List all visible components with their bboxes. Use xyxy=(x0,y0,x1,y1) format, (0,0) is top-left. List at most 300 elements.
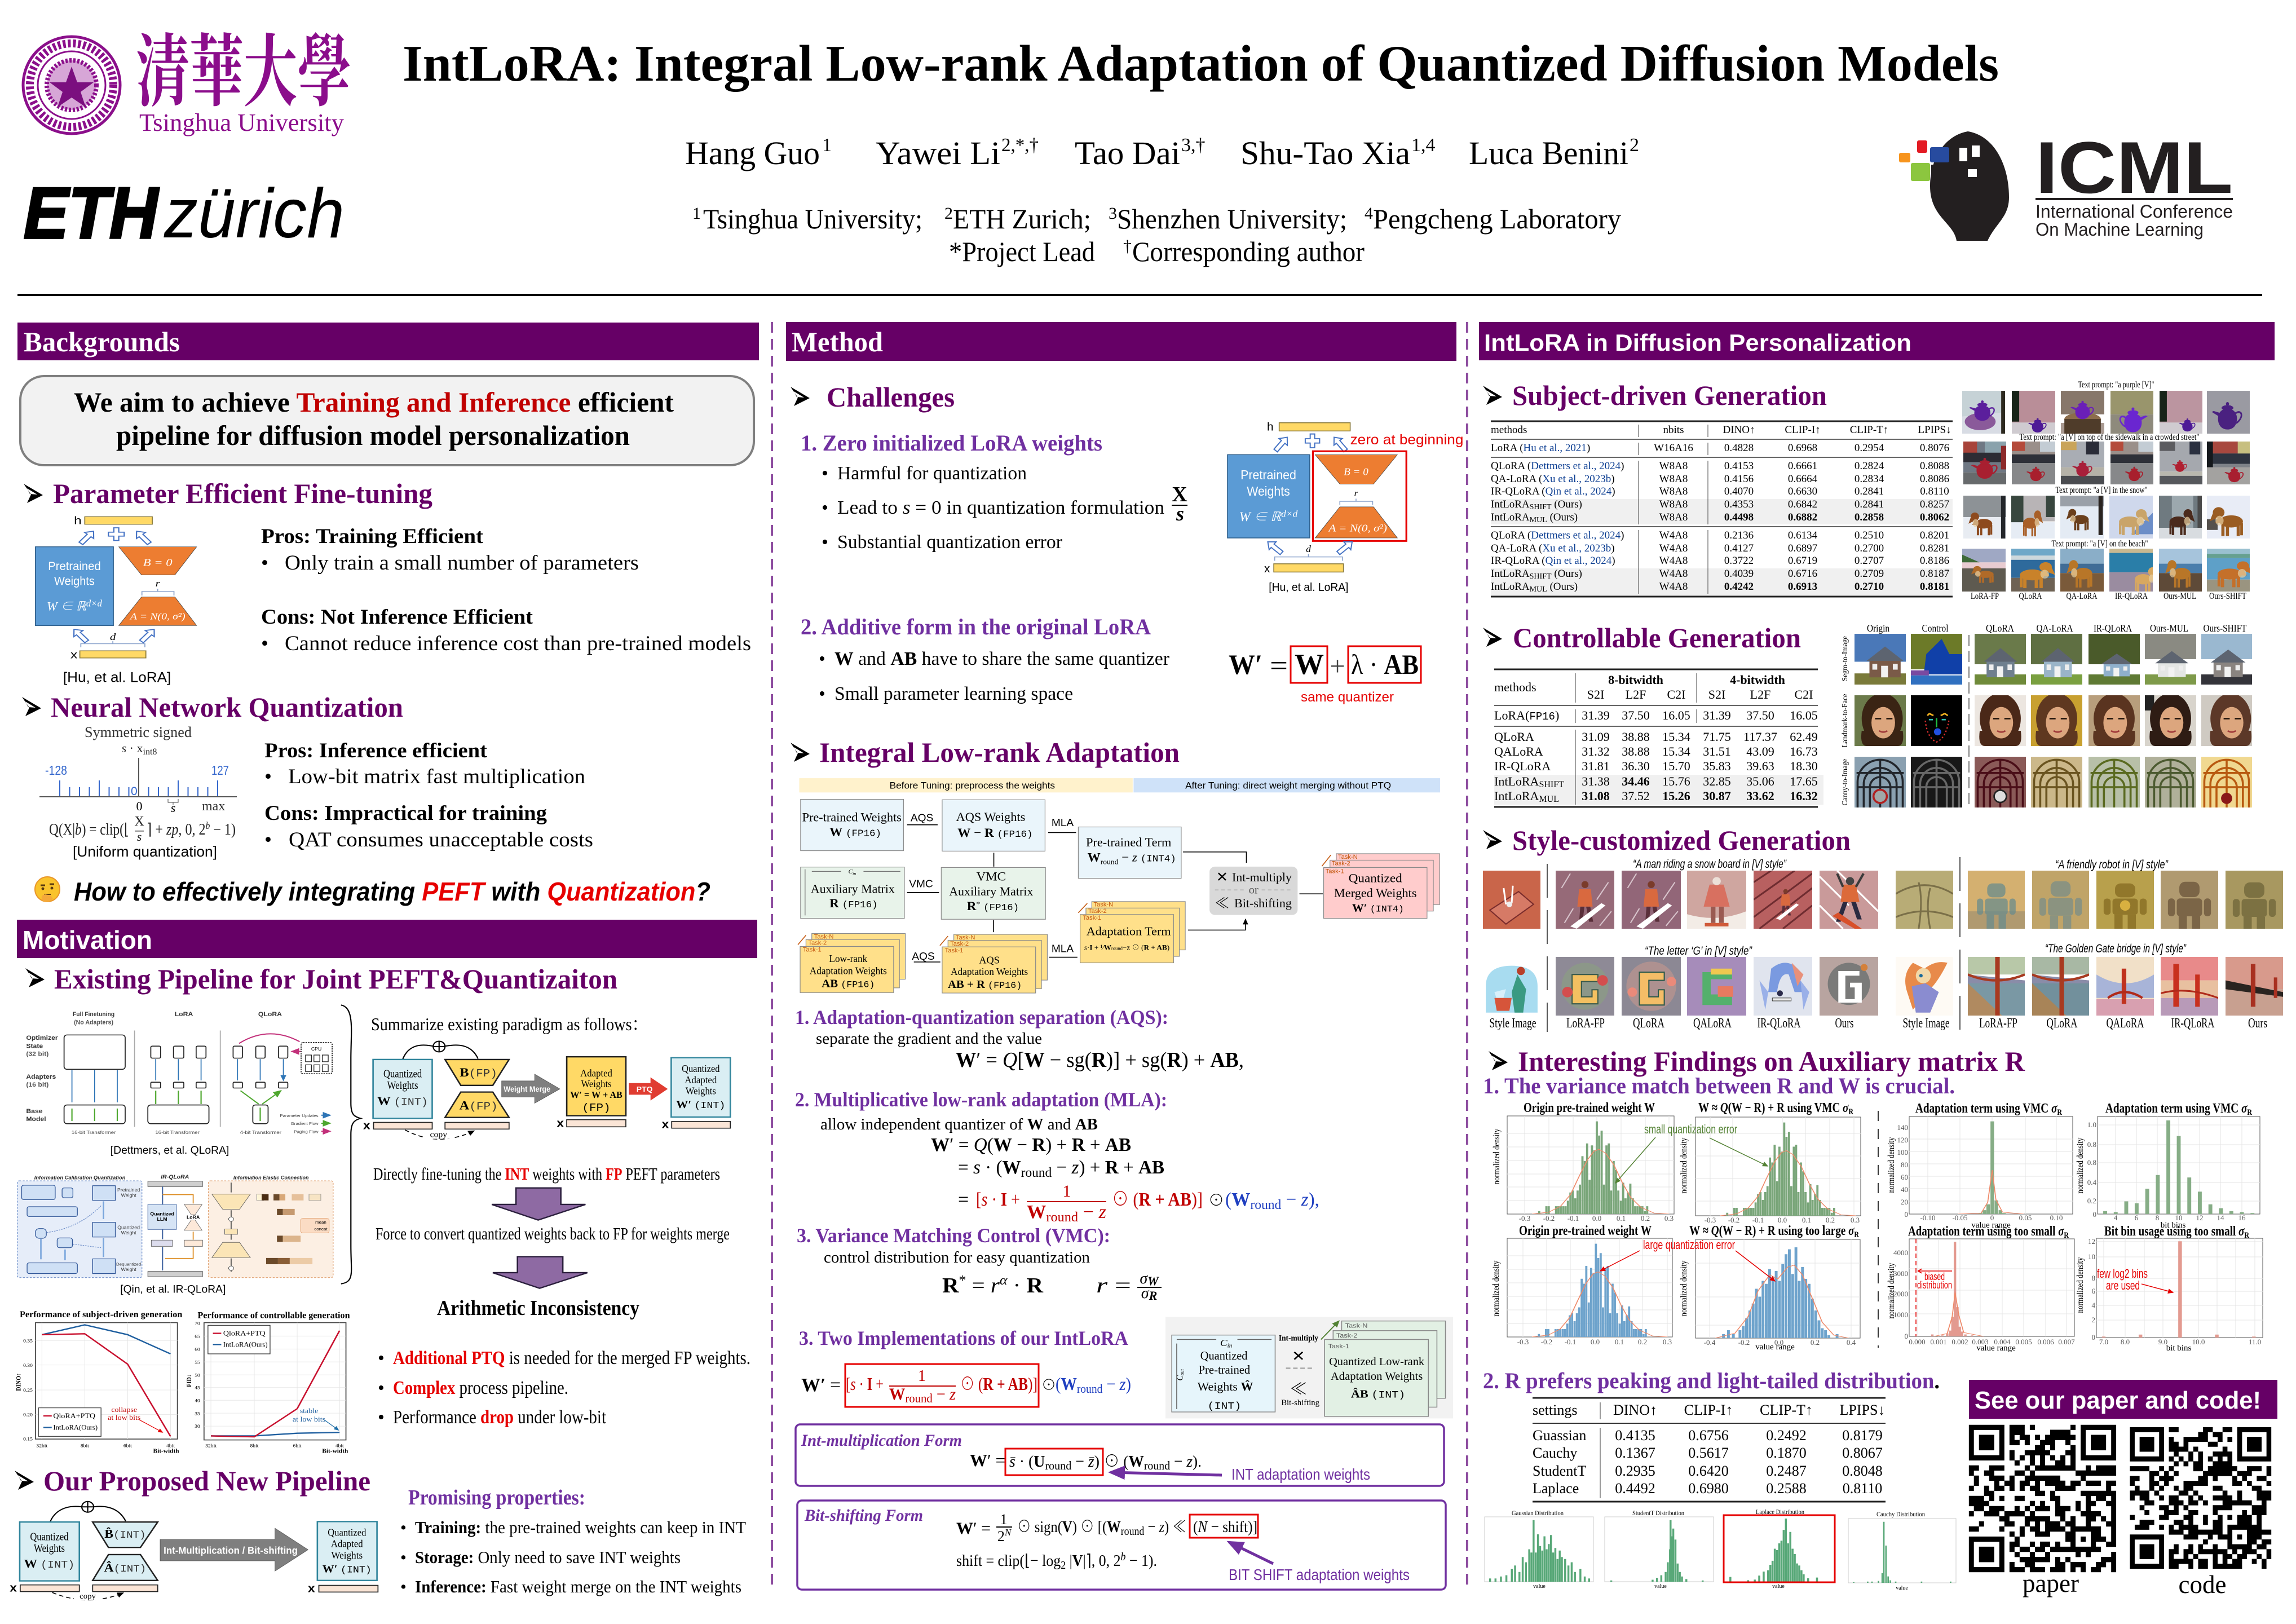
text: MLA: z xyxy=(1098,1202,1106,1223)
chart: subject-driven performance: 0.15 xyxy=(23,1436,33,1441)
text: promising properties: • xyxy=(400,1547,407,1567)
chart: origin weight VMC: 0.0 xyxy=(1592,1214,1601,1223)
chart: reconstructed weight VMC: 0.2 xyxy=(1826,1216,1835,1224)
diagram: IR-QLoRA: Information Elastic Connection xyxy=(233,1175,309,1181)
table: controllable results: 39.63 xyxy=(1746,759,1774,773)
table: controllable results: 37.50 xyxy=(1746,708,1774,722)
diagram: IntLoRA flow: Pre-trained Weights xyxy=(802,810,902,824)
table: controllable results: IntLoRA xyxy=(1494,789,1539,803)
diagram: IntLoRA flow: MLA xyxy=(1052,943,1074,954)
image grid: style samples xyxy=(1483,857,2283,1032)
text: VMC: r xyxy=(991,1274,1000,1298)
text: promising properties: Training: the pre-trained weights can keep in INT xyxy=(415,1517,746,1537)
table: distribution results: 0.6420 xyxy=(1688,1463,1729,1479)
table: controllable results: 4-bitwidth xyxy=(1730,673,1785,687)
chart: subject-driven performance: Bit-width xyxy=(153,1448,179,1454)
chart: controllable performance: 6bit xyxy=(293,1443,302,1448)
chart: bit bins VMC: 0 xyxy=(2093,1210,2096,1219)
chart: StudentT distribution: StudentT Distribution xyxy=(1632,1509,1684,1517)
table: subject-driven results: 0.2834 xyxy=(1855,473,1884,485)
chart: reconstructed weight VMC: W ≈ Q(W − R) + R using VMC σ xyxy=(1698,1101,1869,1115)
table: distribution results: Cauchy xyxy=(1533,1445,1577,1461)
image grid: controllable samples: Origin xyxy=(1867,623,1889,634)
text: AQS: 1. Adaptation-quantization separation (AQS): xyxy=(795,1006,1168,1029)
table: subject-driven results: 0.8088 xyxy=(1920,460,1949,472)
affiliations: Shenzhen University; xyxy=(1117,203,1347,235)
logo: Tsinghua University: 清華大學 xyxy=(136,9,351,122)
chart: reconstructed weight VMC: 0.0 xyxy=(1778,1216,1787,1224)
image grid: style samples: QALoRA xyxy=(2107,1016,2144,1031)
text: quantization pros and cons: Low-bit matrix fast multiplication xyxy=(288,765,585,788)
table: subject-driven results: W4A8 xyxy=(1659,555,1688,567)
table: subject-driven results: 0.3722 xyxy=(1724,555,1754,567)
chart: bit bins too small: 2 xyxy=(2092,1316,2095,1324)
table: subject-driven results: 0.8281 xyxy=(1920,542,1949,554)
chart: bit bins too small: R xyxy=(2244,1231,2249,1240)
diagram: QLoRA comparison: Adapters xyxy=(26,1073,56,1080)
diagram: uniform quantization: 0 xyxy=(131,785,138,798)
table: subject-driven results: (Ours) xyxy=(1547,581,1578,593)
diagram: existing pipeline: Weights xyxy=(581,1079,612,1090)
affiliations: 4 xyxy=(1365,204,1373,223)
diagram: IR-QLoRA: LLM xyxy=(157,1217,167,1222)
table: subject-driven results: 0.4498 xyxy=(1724,511,1754,523)
table: controllable results: QLoRA xyxy=(1494,730,1534,744)
text: challenge 2: • xyxy=(819,648,825,669)
chart: subject-driven performance xyxy=(15,1309,183,1454)
text: MLA: − xyxy=(1078,1202,1099,1223)
chart: bit bins too small: 12 xyxy=(2088,1237,2095,1246)
panel: Bit-shifting form: 2 xyxy=(1061,1559,1066,1572)
chart: adaptation term too small: 0.005 xyxy=(2015,1338,2032,1346)
image grid: controllable samples: QA-LoRA xyxy=(2037,623,2073,634)
text: summarize: Summarize existing paradigm as follows： xyxy=(371,1014,648,1034)
panel: Bit-shifting form: N xyxy=(1004,1527,1012,1538)
text: Two implementations: − xyxy=(933,1385,950,1404)
heading: Motivation xyxy=(17,920,757,958)
diagram: IntLoRA flow: AQS xyxy=(911,812,933,823)
text: Two implementations: ⊙ xyxy=(1041,1377,1056,1393)
diagram: uniform quantization: − 1) xyxy=(210,821,236,839)
image grid: controllable samples: Landmark-to-Face xyxy=(1841,694,1849,748)
diagram: LoRA zero initialization: Pretrained xyxy=(1240,467,1296,482)
table: controllable results: C2I xyxy=(1794,687,1813,701)
table: controllable results: 34.46 xyxy=(1622,774,1650,788)
diagram: IR-QLoRA: Information Calibration Quantization xyxy=(34,1175,125,1181)
image grid: style samples: Style Image xyxy=(1490,1016,1536,1031)
diagram: IntLoRA flow: Pre-trained Term xyxy=(1086,835,1172,849)
diagram: IR-QLoRA xyxy=(17,1174,333,1295)
chart: adaptation term VMC: normalized density xyxy=(1887,1137,1896,1193)
chart: adaptation term VMC: 100 xyxy=(1897,1148,1908,1157)
chart: bit bins VMC: 6 xyxy=(2135,1213,2139,1222)
diagram: proposed pipeline: Adapted xyxy=(331,1538,363,1550)
chart: reconstructed weight too large: 0.4 xyxy=(1847,1338,1856,1347)
table: subject-driven results: MUL xyxy=(1530,516,1547,524)
text: MLA: [s · I + xyxy=(976,1189,1020,1210)
table: distribution results: 0.6980 xyxy=(1688,1480,1729,1497)
panel: Int-multiplication form: W′ = xyxy=(970,1450,1005,1470)
QR code: code: code xyxy=(2179,1570,2226,1599)
diagram: existing pipeline: copy xyxy=(430,1131,448,1139)
chart: controllable performance: 35 xyxy=(195,1411,200,1416)
heading: Challenges: Challenges xyxy=(827,381,955,413)
diagram: quantized weights shift: Task-N xyxy=(1345,1322,1367,1330)
diagram: proposed pipeline: Â(INT) xyxy=(104,1560,146,1575)
text: promising properties xyxy=(400,1486,746,1596)
diagram: IR-QLoRA: Weight xyxy=(121,1266,136,1272)
panel: Method xyxy=(786,322,1463,1590)
image grid: style samples: IR-QLoRA xyxy=(2171,1016,2215,1031)
image grid: controllable samples: Canny-to-Image xyxy=(1841,759,1849,805)
diagram: proposed pipeline: Quantized xyxy=(30,1530,69,1543)
panel: Int-multiplication form: z). xyxy=(1186,1453,1202,1471)
table: controllable results: 31.51 xyxy=(1703,744,1731,758)
chart: adaptation term VMC: value range xyxy=(1971,1221,2011,1230)
diagram: IntLoRA flow: ≪ xyxy=(1215,895,1230,911)
heading: R prefers: 2. R prefers peaking and light-tailed distribution. xyxy=(1483,1368,1940,1393)
chart: adaptation term VMC: 40 xyxy=(1901,1185,1908,1194)
chart: adaptation term too small: normalized density xyxy=(1887,1263,1896,1318)
chart: reconstructed weight too large: normalized density xyxy=(1679,1261,1689,1316)
text: Two implementations: round xyxy=(1077,1382,1102,1396)
table: subject-driven results: DINO↑ xyxy=(1723,424,1755,436)
diagram: IntLoRA flow: Int-multiply xyxy=(1232,870,1292,884)
list: drawbacks: • xyxy=(378,1407,385,1428)
chart: adaptation term too small: value range xyxy=(1976,1344,2016,1353)
chart: bit bins VMC: normalized density xyxy=(2076,1138,2085,1193)
table: subject-driven results: 0.6913 xyxy=(1788,581,1817,593)
diagram: existing pipeline: Weights xyxy=(686,1085,716,1097)
table: distribution results: Guassian xyxy=(1533,1427,1586,1444)
diagram: QLoRA comparison: 16-bit Transformer xyxy=(155,1129,200,1135)
diagram: LoRA zero initialization: r xyxy=(1354,488,1358,498)
chart: controllable performance: 30 xyxy=(195,1424,200,1429)
heading: Interesting Findings: Interesting Findings on Auxiliary matrix R xyxy=(1518,1045,2025,1077)
text: MLA: round xyxy=(1046,1210,1078,1225)
table: subject-driven results: 0.4039 xyxy=(1724,568,1754,580)
panel: Int-multiplication form: − xyxy=(1170,1453,1186,1471)
diagram: LoRA zero initialization: B = 0 xyxy=(1344,466,1368,478)
chart: bit bins too small: few log2 bins xyxy=(2097,1266,2148,1281)
text: directly fine-tuning: Directly fine-tuning the INT weights with FP PEFT parameters xyxy=(373,1164,720,1184)
diagram: QLoRA comparison: [Dettmers, et al. QLoRA] xyxy=(111,1145,229,1157)
diagram: LoRA architecture: [Hu, et al. LoRA] xyxy=(63,669,171,686)
table: controllable results: L2F xyxy=(1750,687,1770,701)
diagram: existing pipeline: (FP) xyxy=(582,1102,611,1114)
chart: bit bins too small: 10.0 xyxy=(2192,1338,2205,1346)
chart: subject-driven performance: 0.35 xyxy=(23,1338,33,1343)
chart: subject-driven performance: IntLoRA(Ours) xyxy=(53,1423,98,1431)
chart: subject-driven performance: collapse xyxy=(111,1405,137,1414)
table: controllable results: 32.85 xyxy=(1703,774,1731,788)
text: challenge 1: s xyxy=(1176,502,1184,525)
table: subject-driven results: 0.6134 xyxy=(1788,529,1818,541)
text: challenge 1: • xyxy=(822,497,828,518)
table: subject-driven results: 0.4828 xyxy=(1724,442,1754,454)
chart: reconstructed weight too large: -0.2 xyxy=(1738,1338,1750,1347)
chart: bit bins too small: 11.0 xyxy=(2249,1338,2261,1346)
diagram: existing pipeline: Weights xyxy=(387,1079,418,1092)
image grid: style samples: QLoRA xyxy=(2047,1016,2078,1031)
diagram: LoRA architecture: d xyxy=(110,632,116,643)
text: VMC: α xyxy=(1000,1273,1008,1288)
text: Two implementations: z) xyxy=(1120,1374,1132,1394)
table: controllable results: 15.34 xyxy=(1662,744,1690,758)
diagram: quantized weights shift: Quantized Low-rank xyxy=(1329,1355,1424,1368)
panel: Int-multiplication form xyxy=(796,1424,1444,1486)
table: subject-driven results: 0.4127 xyxy=(1724,542,1754,554)
table: subject-driven results: 0.6968 xyxy=(1788,442,1817,454)
panel: Bit-shifting form: b xyxy=(1121,1551,1125,1563)
diagram: existing pipeline: Quantized xyxy=(383,1067,422,1080)
diagram: IntLoRA flow: Adaptation Term xyxy=(1087,925,1171,938)
table: distribution results xyxy=(1533,1398,1886,1502)
chart: reconstructed weight VMC: -0.3 xyxy=(1705,1216,1716,1224)
chart: bit bins too small xyxy=(2076,1224,2263,1353)
heading: Backgrounds: Backgrounds xyxy=(24,326,180,358)
diagram: QLoRA comparison: QLoRA xyxy=(258,1011,282,1018)
diagram: IntLoRA flow: Bit-shifting xyxy=(1234,896,1292,910)
chart: adaptation term too small: 0.007 xyxy=(2058,1338,2075,1346)
table: subject-driven results: (Ours) xyxy=(1552,568,1582,580)
table: subject-driven results: 0.2700 xyxy=(1855,542,1884,554)
chart: origin weight too large: normalized density xyxy=(1491,1261,1501,1316)
chart: subject-driven performance: at low bits xyxy=(108,1414,140,1422)
diagram: IntLoRA flow: Task-2 xyxy=(808,940,827,946)
chart: reconstructed weight too large xyxy=(1643,1224,1860,1352)
diagram: LoRA architecture: r xyxy=(156,579,160,589)
chart: controllable performance: 50 xyxy=(195,1373,200,1378)
diagram: QLoRA comparison: Model xyxy=(26,1116,46,1123)
diagram: proposed pipeline: Weights xyxy=(34,1542,65,1555)
chart: controllable performance: 8bit xyxy=(250,1443,259,1448)
panel: Bit-shifting form xyxy=(797,1501,1446,1590)
text: MLA: round xyxy=(1021,1166,1052,1180)
affiliations: 2 xyxy=(944,204,953,223)
heading: Motivation: Motivation xyxy=(23,925,152,955)
chart: controllable performance: 70 xyxy=(195,1321,200,1326)
table: subject-driven results: IntLoRA xyxy=(1491,568,1530,580)
diagram: QLoRA comparison: (16 bit) xyxy=(26,1082,49,1088)
diagram: IntLoRA flow: Adaptation Weights xyxy=(951,966,1028,977)
table: distribution results: CLIP-T↑ xyxy=(1760,1402,1813,1418)
chart: reconstructed weight too large: R xyxy=(1854,1230,1859,1239)
chart: bit bins VMC: 0.8 xyxy=(2087,1140,2096,1149)
image grid: subject-driven samples: IR-QLoRA xyxy=(2115,592,2148,601)
diagram: proposed pipeline: copy xyxy=(80,1592,96,1601)
diagram: IntLoRA flow: Task-N xyxy=(1093,901,1113,908)
chart: bit bins VMC: Adaptation term using VMC σ xyxy=(2105,1101,2272,1116)
text: MLA: − xyxy=(1052,1157,1072,1178)
chart: controllable performance: 60 xyxy=(195,1347,200,1352)
text: VMC: σ xyxy=(1140,1270,1147,1287)
text: Two implementations: 1 xyxy=(918,1367,926,1385)
chart: bit bins too small: 8 xyxy=(2092,1274,2095,1282)
image grid: subject-driven samples: Text prompt: "a purple [V]" xyxy=(2078,380,2154,390)
chart: subject-driven performance: 4bit xyxy=(166,1443,175,1448)
chart: reconstructed weight VMC: -0.2 xyxy=(1728,1216,1739,1224)
diagram: IntLoRA flow: AQS xyxy=(979,955,1000,965)
text: Two implementations: W′ xyxy=(801,1375,826,1396)
diagram: quantized weights shift: Adaptation Weights xyxy=(1331,1370,1423,1383)
table: subject-driven results: 0.2709 xyxy=(1855,568,1884,580)
table: subject-driven results: 0.2858 xyxy=(1855,511,1884,523)
logo: ETH Zurich: ETH xyxy=(24,173,159,254)
chart: bit bins VMC: 10 xyxy=(2175,1213,2182,1222)
chart: bit bins too small: Bit bin usage using too small σ xyxy=(2104,1224,2269,1239)
arrow: down 1 xyxy=(492,1188,585,1220)
diagram: LoRA zero initialization: [Hu, et al. LoRA] xyxy=(1269,581,1348,594)
authors: 2,*,† xyxy=(1001,135,1039,156)
text: LoRA pros and cons xyxy=(261,525,751,655)
diagram: existing pipeline: x xyxy=(557,1116,564,1129)
chart: controllable performance: 55 xyxy=(195,1360,200,1365)
diagram: uniform quantization: -128 xyxy=(45,763,67,778)
chart: adaptation term VMC: 120 xyxy=(1897,1136,1908,1144)
chart: Laplace distribution: value xyxy=(1772,1583,1785,1590)
diagram: IR-QLoRA: IR-QLoRA xyxy=(161,1174,189,1180)
diagram: IntLoRA flow: in xyxy=(853,871,856,876)
chart: adaptation term VMC: -0.05 xyxy=(1952,1213,1968,1222)
table: controllable results: 15.70 xyxy=(1662,759,1690,773)
text: MLA: ⊙ xyxy=(1208,1192,1224,1210)
QR code: paper: paper xyxy=(2023,1569,2079,1597)
diagram: IR-QLoRA: mean xyxy=(315,1220,326,1225)
affiliations: *Project Lead xyxy=(949,236,1095,267)
table: subject-driven results: W8A8 xyxy=(1659,498,1688,510)
text: VMC: * xyxy=(959,1273,966,1288)
text: challenge 1 xyxy=(801,430,1187,553)
text: MLA: round xyxy=(1250,1198,1281,1212)
table: controllable results: C2I xyxy=(1667,687,1686,701)
image grid: subject-driven samples: QLoRA xyxy=(2019,592,2042,601)
text: challenge 2: • xyxy=(819,683,825,704)
diagram: QLoRA comparison: LoRA xyxy=(175,1011,193,1018)
chart: bit bins too small: 9.0 xyxy=(2158,1338,2167,1346)
image grid: style samples: LoRA-FP xyxy=(1566,1016,1605,1031)
chart: adaptation term too small: 4000 xyxy=(1893,1248,1908,1257)
diagram: IntLoRA flow xyxy=(798,778,1440,993)
chart: controllable performance xyxy=(186,1310,350,1454)
authors: 1,4 xyxy=(1411,135,1436,156)
text: MLA: W xyxy=(1027,1202,1046,1223)
table: distribution results: CLIP-I↑ xyxy=(1684,1402,1733,1418)
affiliations: Corresponding author xyxy=(1132,236,1365,267)
list: drawbacks: Additional PTQ is needed for the merged FP weights. xyxy=(393,1348,750,1369)
panel: Bit-shifting form: (N − shift)] xyxy=(1193,1518,1257,1536)
diagram: quantized weights shift: Pre-trained xyxy=(1199,1363,1250,1376)
table: subject-driven results: 0.4070 xyxy=(1724,486,1754,497)
table: controllable results: IntLoRA xyxy=(1494,774,1539,788)
diagram: existing pipeline: Weight Merge xyxy=(504,1085,550,1094)
affiliations: 1 xyxy=(692,204,701,223)
chart: reconstructed weight VMC: small quantization error xyxy=(1644,1122,1737,1136)
diagram: quantized weights shift: ÂB (INT) xyxy=(1351,1387,1405,1401)
table: subject-driven results: IR-QLoRA (Qin et al., 2024) xyxy=(1491,555,1615,567)
diagram: IntLoRA flow: * xyxy=(976,900,980,908)
text: MLA: 2. Multiplicative low-rank adaptation (MLA): xyxy=(795,1088,1167,1111)
table: subject-driven results: 0.6630 xyxy=(1788,486,1817,497)
table: subject-driven results: LPIPS↓ xyxy=(1918,424,1951,436)
diagram: IntLoRA flow: AB + R (FP16) xyxy=(948,978,1022,991)
chart: Laplace distribution: Laplace Distribution xyxy=(1756,1508,1804,1516)
diagram: proposed pipeline: W′ (INT) xyxy=(323,1563,372,1576)
callout: aim: pipeline for diffusion model personalization xyxy=(116,420,630,451)
image grid: controllable samples: IR-QLoRA xyxy=(2094,623,2132,634)
table: controllable results: S2I xyxy=(1587,687,1604,701)
diagram: IntLoRA flow: W (FP16) xyxy=(829,825,881,839)
chart: bit bins VMC: 0.8 xyxy=(2087,1158,2096,1167)
table: subject-driven results: 0.2841 xyxy=(1855,486,1884,497)
affiliations: † xyxy=(1123,237,1132,255)
diagram: IntLoRA flow: VMC xyxy=(976,870,1006,883)
table: controllable results: 36.30 xyxy=(1622,759,1650,773)
chart: reconstructed weight VMC: R xyxy=(1848,1107,1853,1116)
diagram: LoRA zero initialization: x xyxy=(1264,563,1270,575)
authors: Yawei Li xyxy=(876,135,1000,171)
table: subject-driven results: 0.6661 xyxy=(1788,460,1817,472)
chart: reconstructed weight too large: -0.4 xyxy=(1704,1338,1716,1347)
text: VMC: r = xyxy=(1096,1274,1131,1298)
text: challenge 1: 1. Zero initialized LoRA weights xyxy=(801,430,1102,456)
table: subject-driven results: nbits xyxy=(1663,424,1684,436)
table: controllable results: 31.32 xyxy=(1582,744,1610,758)
panel: Bit-shifting form: ⊙ sign(V) ⊙ [(W xyxy=(1017,1518,1123,1536)
table: distribution results: Laplace xyxy=(1533,1480,1579,1497)
diagram: quantized weights shift: Task-1 xyxy=(1328,1343,1349,1350)
table: controllable results: SHIFT xyxy=(1539,780,1564,789)
diagram: IntLoRA flow: Task-N xyxy=(814,934,833,941)
logo: ICML: On Machine Learning xyxy=(2036,219,2204,240)
table: subject-driven results: 0.6897 xyxy=(1788,542,1817,554)
diagram: LoRA architecture: B = 0 xyxy=(143,557,173,568)
chart: bit bins VMC: 1.0 xyxy=(2087,1120,2096,1129)
text: AQS xyxy=(795,1006,1244,1072)
image grid: controllable samples: Control xyxy=(1922,623,1949,634)
diagram: IntLoRA flow: W − R (FP16) xyxy=(957,826,1033,840)
icon: thinking face xyxy=(35,877,60,902)
text: Two implementations: 3. Two Implementations of our IntLoRA xyxy=(799,1327,1128,1349)
heading: IntLoRA in Diffusion Personalization xyxy=(1479,322,2275,360)
text: challenge 2: 2. Additive form in the original LoRA xyxy=(801,614,1151,639)
text: MLA: ⊙ (R + AB)] xyxy=(1112,1189,1203,1210)
chart: adaptation term VMC: R xyxy=(2057,1108,2062,1117)
table: subject-driven results: 0.8110 xyxy=(1920,486,1949,497)
text: MLA: = xyxy=(958,1189,969,1210)
diagram: proposed pipeline: Quantized xyxy=(328,1527,367,1538)
image grid: controllable samples: Ours-SHIFT xyxy=(2204,623,2246,634)
chart: origin weight VMC: normalized density xyxy=(1492,1129,1502,1184)
image grid: style samples: Style Image xyxy=(1902,1016,1950,1031)
chart: adaptation term VMC: 140 xyxy=(1897,1123,1908,1132)
table: subject-driven results: 0.2824 xyxy=(1855,460,1884,472)
diagram: IntLoRA flow: (FP16) xyxy=(983,903,1019,914)
chart: adaptation term too small: 0.002 xyxy=(1951,1338,1968,1346)
diagram: IntLoRA flow: AB (FP16) xyxy=(822,978,875,990)
image grid: subject-driven samples: Text prompt: "a [V] in the snow" xyxy=(2056,486,2147,495)
diagram: existing pipeline: Adapted xyxy=(580,1068,612,1079)
diagram: IntLoRA flow: Task-N xyxy=(1338,854,1358,860)
list: drawbacks xyxy=(378,1348,750,1428)
diagram: quantized weights shift: ≪ xyxy=(1290,1380,1308,1398)
table: controllable results: 30.87 xyxy=(1703,789,1731,803)
diagram: QLoRA comparison: Optimizer xyxy=(26,1035,58,1042)
list: drawbacks: • xyxy=(378,1378,385,1398)
chart: bit bins VMC: 16 xyxy=(2238,1213,2246,1222)
diagram: IntLoRA flow: ✕ xyxy=(1216,870,1228,885)
diagram: IntLoRA flow: R xyxy=(967,899,977,913)
